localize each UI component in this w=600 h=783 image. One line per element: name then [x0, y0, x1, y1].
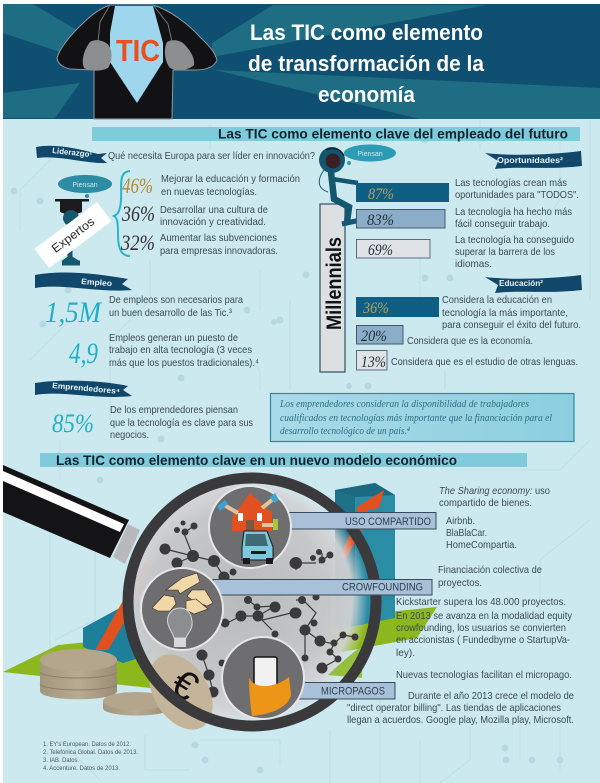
- text: aumentar: para empresas innovadoras.: [160, 245, 278, 257]
- text: educación: para conseguir el éxito del futuro.: [442, 319, 581, 331]
- bar 36%: [356, 297, 439, 317]
- panel: emprendedores: [35, 381, 253, 441]
- illustration: magnifying glass over economy: [3, 465, 437, 741]
- bar 83%: [356, 210, 445, 229]
- ribbon: Oportunidades: [485, 151, 582, 169]
- text: empleos generan: trabajo en alta tecnología (3 veces: [109, 344, 252, 356]
- text: crowfounding: [396, 564, 573, 659]
- text: educación: Considera la educación en: [442, 294, 552, 306]
- bar 87%: [356, 183, 449, 203]
- icon: hand right: [187, 590, 213, 606]
- ribbon: Emprendedores: [35, 381, 132, 397]
- bar 13%: 13%: [361, 354, 386, 371]
- brace: [114, 171, 130, 256]
- ribbon: Educación: [485, 275, 582, 293]
- ribbon: Liderazgo: [36, 146, 107, 163]
- title: Las TIC como elemento: [250, 20, 483, 45]
- footnotes: 4. Accenture. Datos de 2013.: [43, 765, 120, 772]
- text: crowfounding: Kickstarter supera los 48.000 proyectos.: [396, 596, 566, 608]
- text: micropagos: "direct operator billing". Las tiendas de aplicaciones: [347, 702, 561, 714]
- text: de los emprendedores: que la tecnología es clave para sus: [110, 417, 253, 429]
- icon: seated figure with headphones: [319, 147, 365, 224]
- header banner: [3, 4, 600, 119]
- text: educación: tecnología la más importante,: [442, 307, 568, 319]
- bar 83%: 83%: [367, 212, 394, 229]
- label: Expertos: [35, 202, 111, 268]
- text: oportunidades: fácil conseguir trabajo.: [455, 218, 550, 230]
- bubble: Piensan: [58, 175, 112, 198]
- text: uso compartido: compartido de bienes.: [439, 497, 532, 509]
- lens: [130, 480, 374, 724]
- text: micropagos: Durante el año 2013 crece el modelo de: [408, 690, 574, 702]
- ribbon: Empleo: Empleo: [81, 277, 113, 288]
- text: uso compartido: HomeCompartia.: [446, 539, 517, 551]
- ribbon: Emprendedores: Emprendedores⁴: [52, 381, 120, 396]
- icon: car: [242, 531, 273, 560]
- text: aumentar: Aumentar las subvenciones: [160, 232, 277, 244]
- red growth arrow: [95, 490, 384, 650]
- icon: bulb: [168, 608, 192, 638]
- icon: hand lower right: [186, 599, 208, 614]
- callout: desarrollo tecnológico de un país.⁴: [280, 426, 410, 437]
- text: micropagos: Nuevas tecnologías facilitan el micropago.: [396, 669, 572, 681]
- text: uso compartido: The Sharing economy: uso: [439, 485, 550, 497]
- section heading: nuevo modelo económico: Las TIC como elemento clave en un nuevo modelo económico: [56, 452, 457, 468]
- text: micropagos: [347, 669, 574, 726]
- bar 20%: 20%: [361, 328, 387, 345]
- stat 85%: 85%: [52, 409, 94, 438]
- text: oportunidades: Las tecnologías crean más: [455, 177, 567, 189]
- text: uso compartido: Airbnb.: [446, 515, 475, 527]
- bubble: Piensan: Piensan: [357, 151, 383, 158]
- teal low box: [83, 598, 165, 663]
- bubble: Piensan: Piensan: [72, 182, 98, 189]
- bar 13%: [356, 350, 387, 371]
- icon: hand left: [152, 595, 176, 611]
- text: desarrollar: [160, 204, 268, 228]
- euro coin: €: [163, 661, 206, 710]
- millennials column: [320, 204, 346, 372]
- text: crowfounding: ley).: [396, 647, 415, 659]
- footnotes: 3. IAB. Datos.: [43, 757, 79, 764]
- molecule network: [160, 520, 358, 698]
- bar 87%: 87%: [368, 186, 394, 203]
- flat coin: [103, 692, 170, 716]
- bar 69%: 69%: [368, 242, 393, 259]
- label bar: micropagos: MICROPAGOS: [321, 686, 385, 698]
- icon: phone: [254, 657, 277, 689]
- text: de empleos: [109, 294, 243, 319]
- ribbon: Liderazgo: Liderazgo¹: [52, 146, 93, 159]
- label bar: uso compartido: [285, 512, 436, 529]
- icon: hand top: [166, 573, 200, 594]
- text: crowfounding: Financiación colectiva de: [438, 564, 542, 576]
- millennials column: Millennials: [323, 237, 346, 330]
- label bar: uso compartido: USO COMPARTIDO: [345, 516, 431, 528]
- text: oportunidades: La tecnología ha hecho más: [455, 206, 572, 218]
- icon: left fist: [83, 40, 112, 71]
- TIC logo text: TIC: [116, 33, 160, 68]
- panel: liderazgo: [35, 146, 315, 268]
- bubble: Piensan: [344, 144, 396, 165]
- stat 32%: 32%: [120, 230, 155, 255]
- text: crowfounding: en accionistas ( Fundedbyme o StartupVa-: [396, 634, 570, 646]
- text: crowfounding: En 2013 se avanza en la modalidad equity: [396, 610, 573, 622]
- green plane: [3, 607, 437, 688]
- text: de los emprendedores: negocios.: [110, 429, 149, 441]
- title: economía: [318, 82, 416, 107]
- icon: superhero opening shirt: [57, 5, 217, 119]
- text: empleos generan: [109, 332, 259, 369]
- text: de empleos: De empleos son necesarios para: [109, 294, 243, 306]
- label: Expertos: Expertos: [49, 214, 97, 256]
- bar 20%: [356, 326, 403, 345]
- text: oportunidades: La tecnología ha conseguido: [455, 234, 574, 246]
- text: crowfounding: proyectos.: [438, 577, 482, 589]
- icon circle: wallet and phone: [222, 637, 304, 719]
- text: micropagos: llegan a acuerdos. Google play, Mozilla play, Microsoft.: [347, 714, 574, 726]
- callout: cualificados en tecnologías más importante que la financiación para el: [280, 413, 552, 424]
- panel: millennials: [319, 144, 582, 372]
- icon circle: hands and light bulb: [141, 568, 223, 650]
- footnotes: 2. Telefónica Global. Datos de 2013.: [43, 749, 138, 756]
- text: educación: Considera que es el estudio de otras lenguas.: [391, 356, 578, 368]
- icon: graduate expert: [55, 199, 89, 263]
- label bar: crowfounding: CROWFOUNDING: [342, 582, 423, 594]
- footnotes: 1. EY's European. Datos de 2012.: [43, 741, 131, 748]
- text: educación: Considera que es la economía.: [407, 335, 533, 347]
- text: uso compartido: BlaBlaCar.: [446, 527, 487, 539]
- icon circle: house and car: [209, 486, 291, 568]
- text: aumentar: [160, 232, 278, 257]
- text: mejorar: en nuevas tecnologías.: [161, 186, 257, 198]
- text: oportunidades: oportunidades para "TODOS".: [455, 189, 579, 201]
- callout: [270, 394, 574, 442]
- icon: right fist: [165, 40, 194, 70]
- stat 4,9: 4,9: [69, 337, 98, 370]
- text: de empleos: un buen desarrollo de las Tic.³: [109, 307, 232, 319]
- teal column: [335, 483, 395, 630]
- text: crowfounding: crowfounding, los usuarios se convierten: [396, 622, 566, 634]
- footnotes: [43, 741, 138, 772]
- bar 69%: [356, 240, 430, 259]
- text: oportunidades: [455, 177, 579, 270]
- magnifier handle: [3, 465, 140, 564]
- bar 36%: 36%: [362, 300, 389, 317]
- text: de los emprendedores: De los emprendedores piensan: [110, 404, 238, 416]
- label bar: crowfounding: [213, 580, 432, 595]
- stat 36%: 36%: [121, 201, 155, 226]
- text: de los emprendedores: [110, 404, 253, 441]
- green plane seen through lens: [328, 645, 363, 678]
- stat 1,5M: 1,5M: [45, 296, 103, 329]
- section heading: empleado del futuro: Las TIC como elemento clave del empleado del futuro: [218, 126, 568, 142]
- stat 46%: 46%: [122, 173, 153, 198]
- callout: Los emprendedores consideran la disponibilidad de trabajadores: [279, 399, 529, 410]
- ribbon: Empleo: [35, 272, 132, 291]
- icon: wallet: [249, 677, 291, 716]
- magnifier ring: [128, 478, 376, 726]
- ribbon: Oportunidades: Oportunidades²: [497, 156, 563, 165]
- stacked coins: [40, 649, 117, 699]
- text: oportunidades: idiomas.: [455, 258, 492, 270]
- title: [248, 20, 485, 107]
- question: Qué necesita Europa para ser líder en innovación?: [108, 150, 315, 162]
- text: uso compartido: [439, 485, 550, 551]
- text: empleos generan: Empleos generan un puesto de: [109, 332, 238, 344]
- panel: empleo: [35, 272, 259, 370]
- text: desarrollar: innovación y creatividad.: [160, 216, 266, 228]
- text: oportunidades: superar la barrera de los: [455, 246, 555, 258]
- euro coin: [136, 643, 226, 741]
- icon: hands: [224, 500, 275, 525]
- text: desarrollar: Desarrollar una cultura de: [160, 204, 268, 216]
- text: educación: [391, 294, 581, 368]
- ribbon: Educación: Educación²: [499, 279, 543, 288]
- text: mejorar: [161, 173, 300, 198]
- text: empleos generan: más que los puestos tradicionales).⁴: [109, 357, 259, 369]
- title: de transformación de la: [248, 51, 485, 76]
- icon: house: [232, 493, 272, 531]
- text: mejorar: Mejorar la educación y formación: [161, 173, 300, 185]
- label bar: micropagos: [295, 682, 395, 699]
